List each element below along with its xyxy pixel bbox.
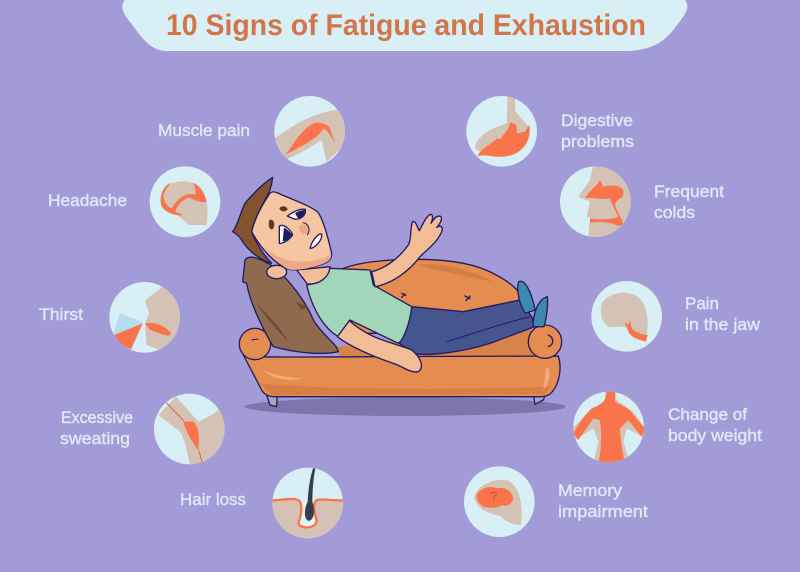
label: excessive sweating <box>60 408 133 448</box>
icon: excessive sweating <box>154 394 225 465</box>
label: pain in the jaw: in the jaw <box>685 315 761 334</box>
label: excessive sweating: Excessive <box>61 408 133 427</box>
label: change of body weight: Change of <box>668 405 747 424</box>
eyes <box>279 209 305 243</box>
lower arm <box>337 321 421 372</box>
neck and ear <box>297 267 330 284</box>
label: change of body weight <box>668 405 762 445</box>
mouth <box>310 234 322 248</box>
raised arm <box>372 214 442 287</box>
label: digestive problems: problems <box>561 132 634 151</box>
pillow <box>243 257 338 353</box>
icon: memory impairment: ? <box>491 489 498 503</box>
label: pain in the jaw: Pain <box>685 294 719 313</box>
icon: change of body weight <box>573 390 645 463</box>
hair <box>233 177 273 263</box>
man <box>233 177 548 372</box>
label: pain in the jaw <box>685 294 761 334</box>
label: hair loss: Hair loss <box>180 490 246 509</box>
jeans <box>399 300 535 354</box>
icon: headache <box>150 166 220 237</box>
shoes <box>518 281 548 327</box>
head <box>252 192 332 270</box>
label: headache: Headache <box>48 191 127 210</box>
illustration: tired man lying on sofa <box>233 177 566 416</box>
sofa shadow <box>244 397 566 416</box>
icon: digestive problems <box>466 95 537 167</box>
icon: memory impairment <box>464 466 535 537</box>
label: memory impairment: Memory <box>558 481 623 500</box>
icon: frequent colds <box>560 165 632 238</box>
label: excessive sweating: sweating <box>60 429 130 448</box>
title banner <box>122 0 687 51</box>
label: frequent colds <box>654 182 724 222</box>
label: memory impairment <box>558 481 648 521</box>
label: frequent colds: colds <box>654 203 695 222</box>
label: thirst: Thirst <box>39 305 83 324</box>
icon: hair loss <box>270 468 345 542</box>
title: 10 Signs of Fatigue and Exhaustion <box>166 9 646 42</box>
nose <box>298 224 309 234</box>
label: digestive problems: Digestive <box>561 111 633 130</box>
icon: muscle pain <box>274 96 347 167</box>
label: change of body weight: body weight <box>668 426 762 445</box>
label: frequent colds: Frequent <box>654 182 724 201</box>
icon: pain in the jaw <box>591 281 662 352</box>
label: muscle pain: Muscle pain <box>158 121 250 140</box>
brows <box>269 206 288 229</box>
label: memory impairment: impairment <box>558 502 648 521</box>
shirt <box>307 268 412 343</box>
sofa <box>239 259 562 407</box>
icon: thirst <box>109 282 182 353</box>
label: digestive problems <box>561 111 634 151</box>
